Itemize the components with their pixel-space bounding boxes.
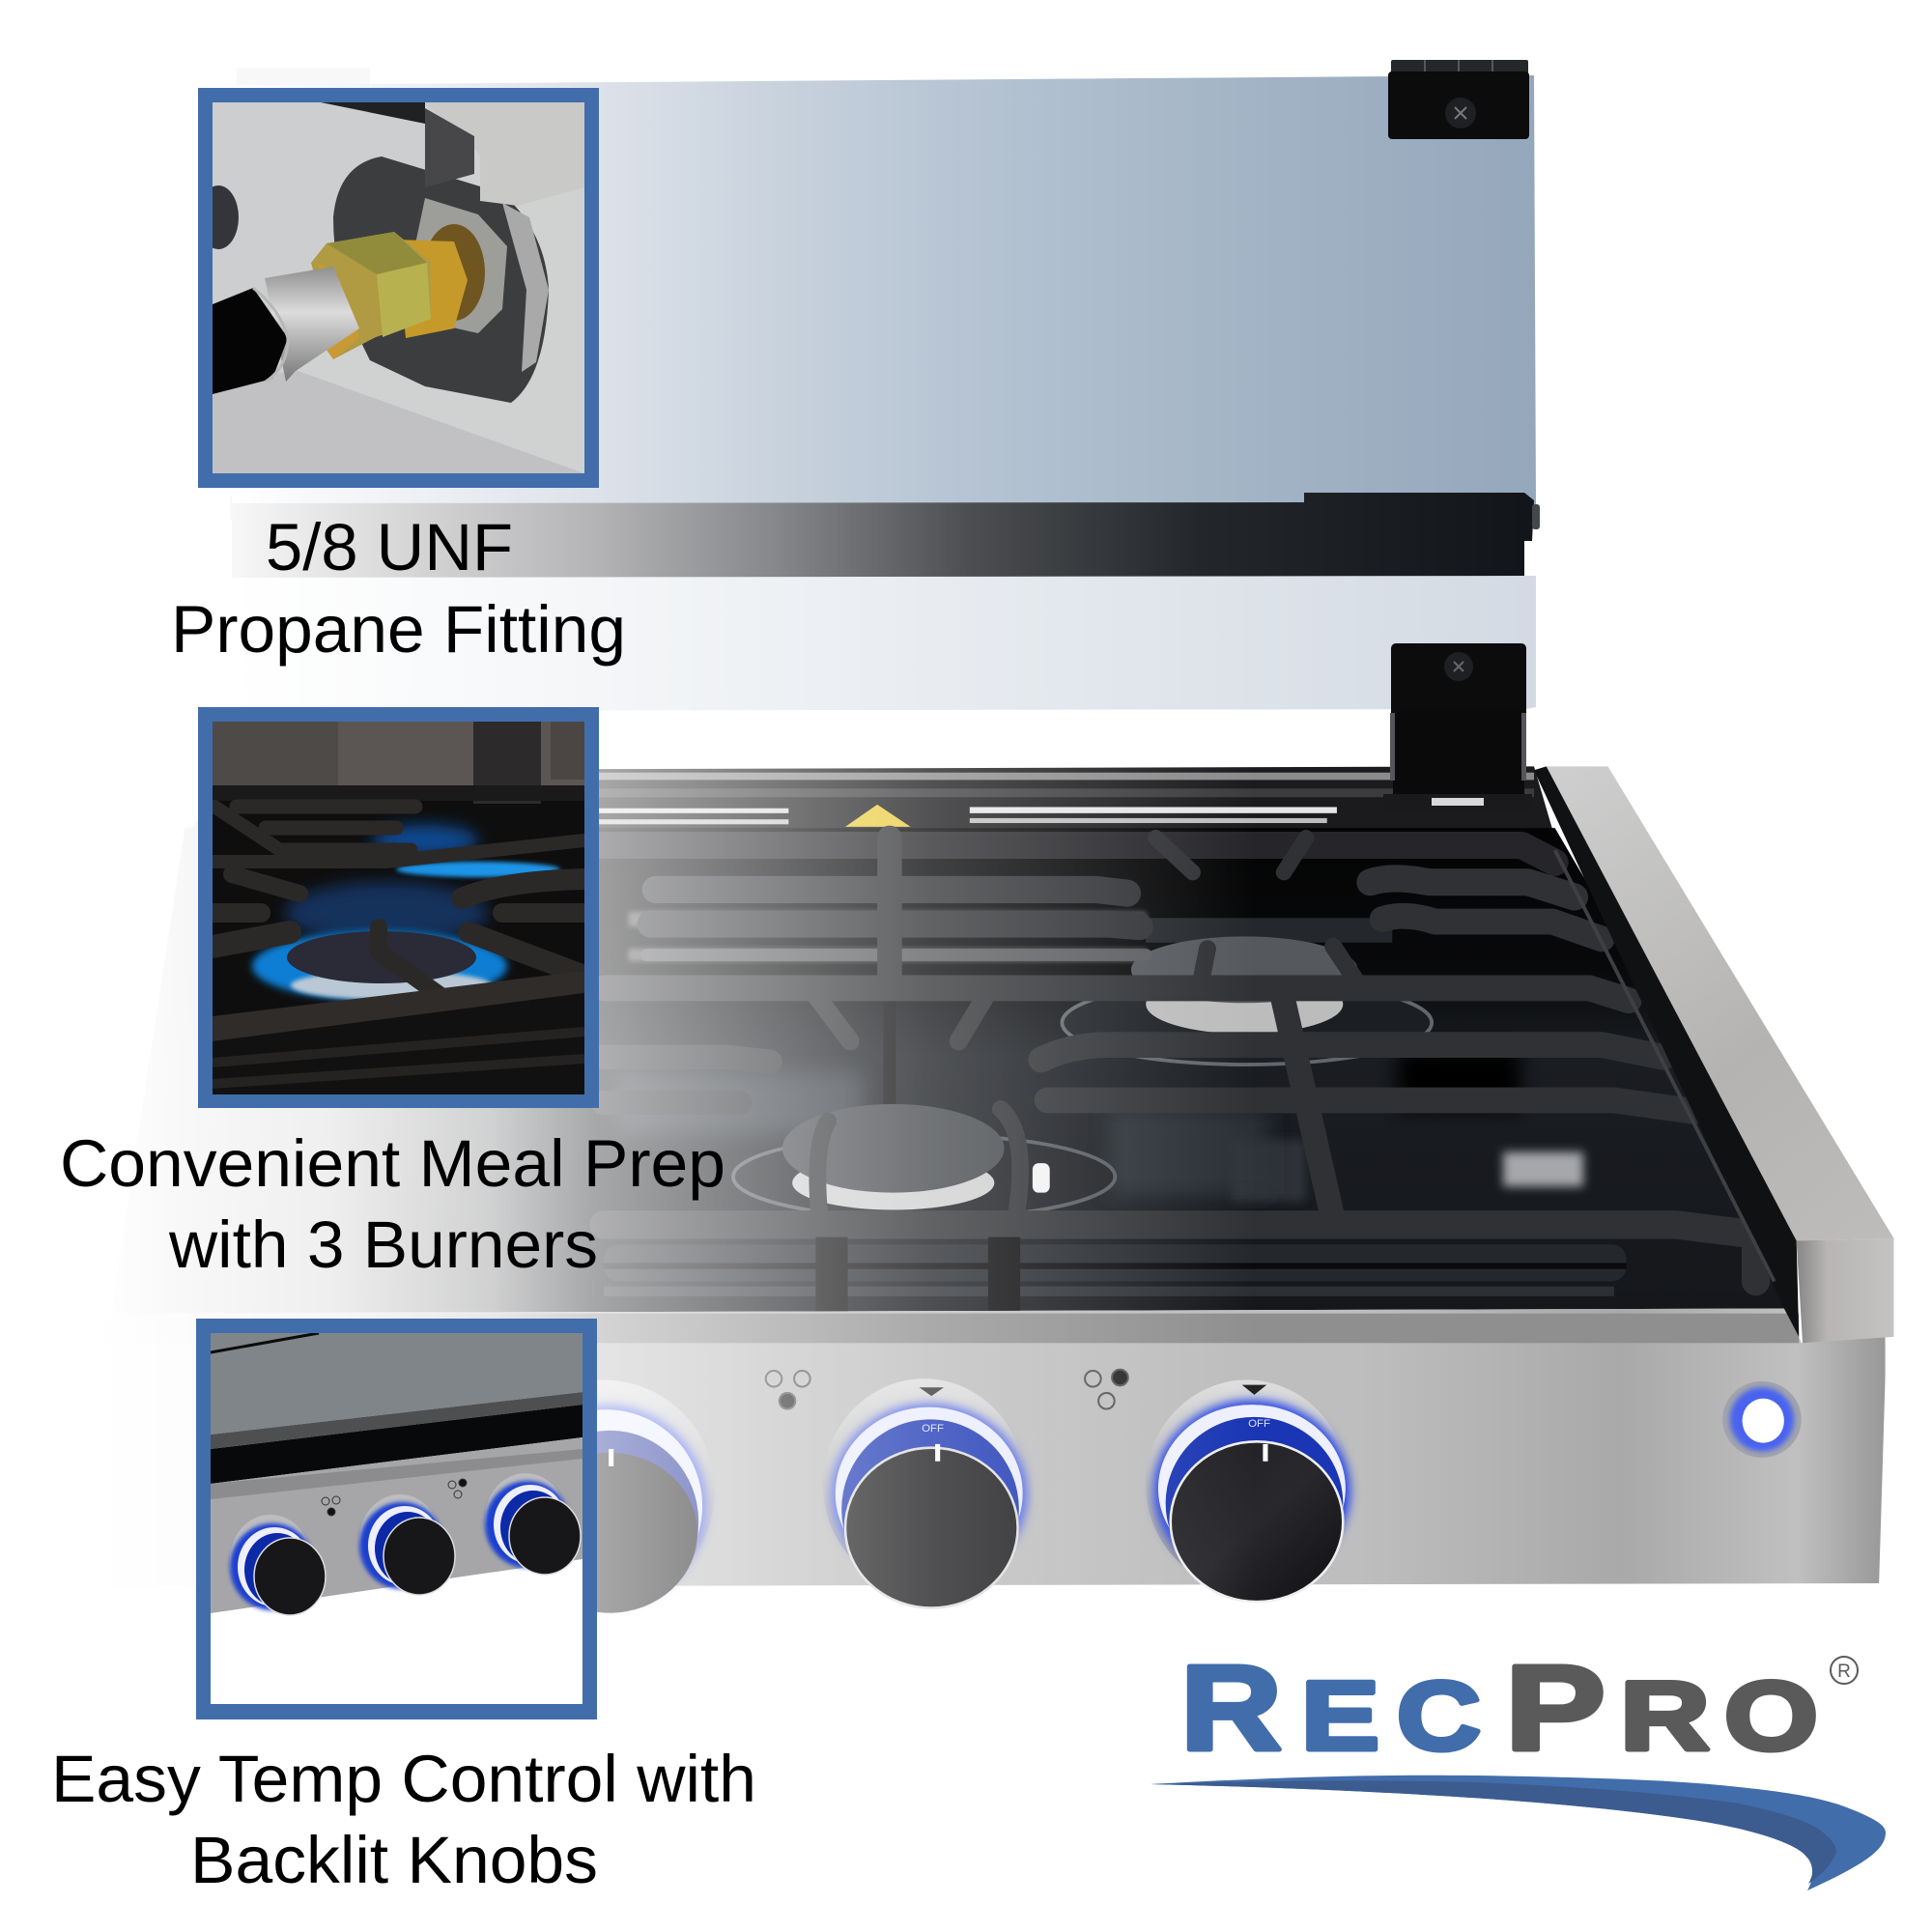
knob right — [1146, 1380, 1350, 1602]
RecPro logo — [1151, 1641, 1886, 1890]
drip tray ridges — [604, 1237, 1627, 1314]
back right burner — [1062, 936, 1432, 1065]
photo: fitting — [198, 102, 584, 473]
enamel burner tray — [111, 828, 1797, 1314]
panel: backlit knobs inset — [196, 1319, 597, 1719]
burner indicator dots — [766, 1370, 1128, 1409]
faint ghost hinges — [230, 68, 458, 711]
label: with 3 burners: with 3 Burners — [168, 1208, 598, 1282]
registered mark — [1831, 1657, 1858, 1684]
lid dark band — [232, 493, 1534, 578]
photo: knobs — [211, 1333, 582, 1704]
registered mark: R — [1837, 1662, 1851, 1682]
label: convenient meal prep: Convenient Meal Prep — [60, 1126, 725, 1201]
frame — [196, 1319, 597, 1719]
lid lower glass — [232, 576, 1536, 711]
photo: flame — [213, 722, 584, 1094]
top hinge — [1388, 60, 1529, 139]
frame — [198, 707, 599, 1108]
label: backlit knobs: Backlit Knobs — [190, 1823, 598, 1897]
logo wordmark: O — [1724, 1662, 1818, 1771]
knob left — [493, 1380, 715, 1613]
front control panel — [74, 1309, 1886, 1587]
logo wordmark: R — [1180, 1641, 1282, 1776]
cast iron grates — [604, 838, 1756, 1282]
logo wordmark — [1180, 1641, 1818, 1776]
bottom hinge — [1383, 643, 1532, 811]
stove cooktop photo — [0, 763, 1893, 1652]
knob middle: OFF — [922, 1423, 944, 1435]
label: easy temp control: Easy Temp Control with — [51, 1742, 756, 1816]
label: propane fitting: Propane Fitting — [171, 592, 626, 667]
left fade overlay — [0, 763, 1256, 1652]
back rim of cooktop — [185, 766, 1555, 838]
knob right: OFF — [1248, 1418, 1270, 1430]
knob middle — [823, 1378, 1028, 1608]
right side rail — [1534, 766, 1893, 1343]
panel: burner flame inset — [198, 707, 599, 1108]
panel: propane fitting inset — [198, 88, 599, 488]
label: 5/8 UNF: 5/8 UNF — [266, 510, 513, 584]
frame — [198, 88, 599, 488]
logo wordmark: P — [1505, 1641, 1605, 1776]
lid upper glass — [232, 75, 1536, 504]
logo swoosh — [1151, 1776, 1886, 1890]
latch bolt — [1532, 504, 1540, 529]
power button LED — [1722, 1381, 1802, 1458]
logo wordmark: E — [1301, 1662, 1379, 1771]
logo wordmark: C — [1397, 1662, 1481, 1771]
logo wordmark: R — [1620, 1662, 1710, 1771]
glass lid — [232, 60, 1540, 811]
front burner — [733, 1104, 1115, 1218]
